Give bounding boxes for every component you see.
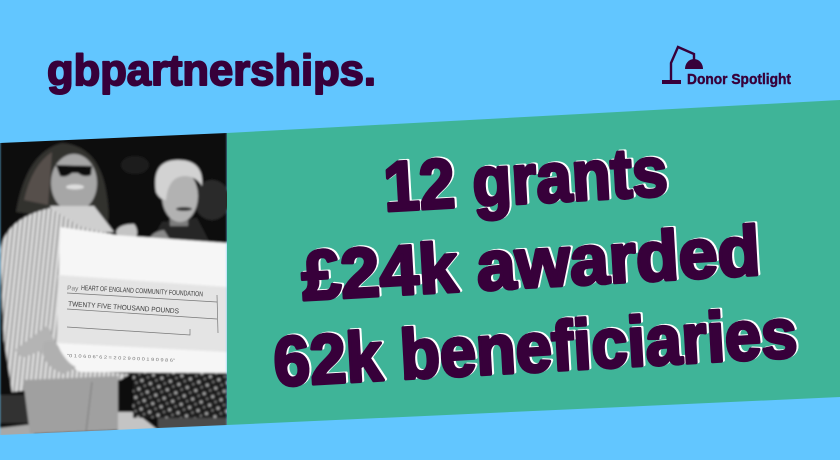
- stat: 12 grants: 12 grants: [381, 132, 669, 226]
- stat: 62k beneficiaries: 62k beneficiaries: [271, 294, 799, 401]
- icon: desk lamp: [662, 47, 703, 84]
- giant cheque: [57, 227, 227, 373]
- stat: 62k beneficiaries: 62k beneficiaries: [273, 293, 801, 400]
- green slanted panel: [227, 100, 840, 425]
- stat: £24k awarded: £24k awarded: [301, 210, 764, 314]
- cheque text: Pay: [67, 285, 79, 293]
- logo: gbpartnerships.: gbpartnerships.: [47, 46, 376, 95]
- cheque lines: [67, 293, 218, 335]
- photo background foliage: [0, 130, 230, 440]
- stat: £24k awarded: £24k awarded: [299, 211, 762, 315]
- headline statistics: [271, 131, 801, 401]
- cheque text: "0 1 0 6 0 6" 6 2 = 2 0 2 9 0 0 0 1 9 0 9 8 6": [67, 353, 176, 363]
- hand at bottom of cheque: [42, 341, 76, 374]
- cheque text: HEART OF ENGLAND COMMUNITY FOUNDATION: [81, 285, 203, 298]
- cheque text: TWENTY FIVE THOUSAND POUNDS: [68, 301, 179, 315]
- photo: two women holding a giant cheque: [0, 130, 230, 440]
- stat: 12 grants: 12 grants: [383, 131, 671, 225]
- woman on left: [0, 143, 137, 434]
- label: Donor Spotlight: Donor Spotlight: [687, 71, 791, 88]
- cheque text: [67, 285, 203, 363]
- donor spotlight badge: [662, 47, 791, 88]
- woman on right: [133, 160, 227, 430]
